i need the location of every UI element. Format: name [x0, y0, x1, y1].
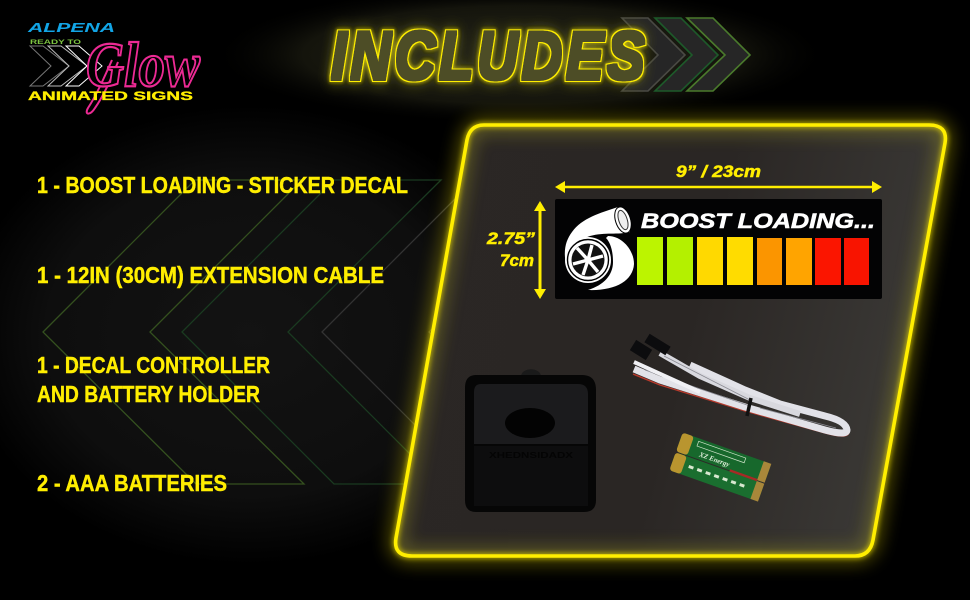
item: controller: 1 - DECAL CONTROLLER: [37, 352, 270, 378]
logo: [26, 20, 200, 114]
item: batteries: 2 - AAA BATTERIES: [37, 470, 227, 496]
sticker decal: [555, 199, 882, 299]
controller embossed label: XHEDNSIDADX: [489, 451, 574, 460]
title chevrons: [622, 18, 750, 91]
logo script word: Glow: [86, 29, 200, 100]
panel near glow: [396, 125, 945, 556]
height dimension label: 7cm: [500, 251, 534, 270]
item: extension cable: 1 - 12IN (30CM) EXTENSION CABLE: [37, 262, 384, 288]
arrow: width: [555, 181, 882, 193]
title background glow: [210, 0, 830, 125]
title: INCLUDES: [331, 19, 645, 94]
logo brand name: ALPENA: [26, 20, 115, 35]
item: sticker decal: 1 - BOOST LOADING - STICKER DECAL: [37, 172, 408, 198]
height dimension label: [486, 229, 536, 270]
panel inner glow: [396, 125, 945, 556]
cable: [633, 338, 849, 436]
panel outer glow: [396, 125, 945, 556]
battery brand: XZ Energy: [697, 450, 731, 469]
logo tagline: READY TO: [30, 39, 81, 46]
controller: [465, 369, 596, 512]
item: battery holder line: AND BATTERY HOLDER: [37, 381, 260, 407]
batteries: [669, 433, 771, 502]
bar meter: [637, 237, 869, 285]
sticker base: [555, 199, 882, 299]
arrow: height: [534, 201, 546, 299]
background chevrons: [43, 180, 581, 484]
logo subtitle: ANIMATED SIGNS: [28, 89, 193, 103]
height dimension label: 2.75”: [486, 229, 536, 248]
list of included items: [37, 172, 408, 496]
background haze: [0, 105, 540, 565]
panel: product: [396, 125, 945, 556]
width dimension label: 9” / 23cm: [676, 162, 761, 181]
icon: turbo: [565, 205, 634, 290]
panel neon border: [396, 125, 945, 556]
sticker heading: BOOST LOADING...: [641, 210, 875, 233]
logo script descender: [87, 60, 118, 114]
logo chevrons: [30, 46, 102, 86]
panel fill: [396, 125, 945, 556]
